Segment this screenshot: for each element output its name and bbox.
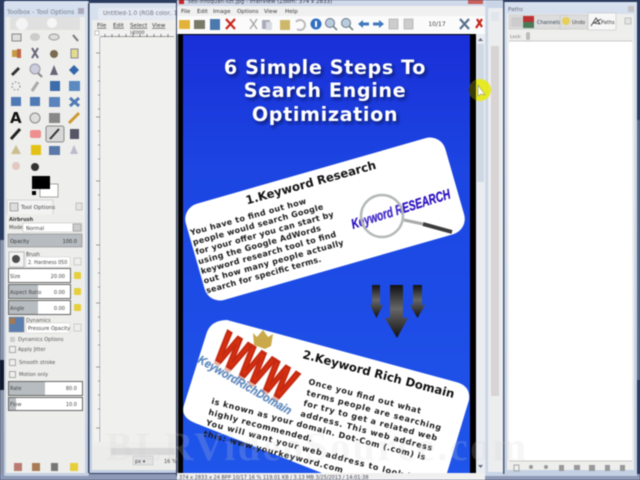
title: Optimization xyxy=(252,103,398,126)
viewer menu bar: View xyxy=(264,9,278,15)
image viewer window xyxy=(176,0,486,480)
step 1 body text: out how many people actually xyxy=(202,238,345,286)
viewer menu bar: Help xyxy=(285,9,298,15)
icon: keyword rich domain www logo: KeywordRichDomain xyxy=(196,352,294,418)
icon: keyword research magnifier: Keyword RESEARCH xyxy=(349,185,453,232)
title: Search Engine xyxy=(244,79,406,102)
right dock strip xyxy=(484,0,503,476)
viewer menu bar: Image xyxy=(213,9,231,15)
step 2 body text xyxy=(202,377,442,480)
status bar xyxy=(177,473,485,480)
icon: yellow cursor highlight xyxy=(469,79,491,101)
title: Optimization xyxy=(254,106,400,128)
airbrush options panel: Airbrush xyxy=(9,217,34,223)
icon: keyword rich domain www logo: WWW xyxy=(207,324,304,409)
tool icons xyxy=(10,33,80,171)
title: Search Engine xyxy=(246,82,408,104)
brush size, aspect and angle sliders: 0.00 xyxy=(54,290,65,296)
paths dock window: Lock: xyxy=(510,34,522,40)
viewer menu bar: Options xyxy=(237,9,259,15)
viewer toolbar xyxy=(177,16,485,34)
airbrush options panel: Normal xyxy=(26,226,44,232)
step 1 heading: 1.Keyword Research xyxy=(244,158,378,207)
tool options tab xyxy=(7,200,82,215)
rate and flow sliders xyxy=(8,382,82,410)
step 1 body text: You have to find out how xyxy=(188,197,308,238)
image black frame xyxy=(178,34,476,473)
dynamics options: Apply Jitter xyxy=(18,347,47,353)
airbrush options panel xyxy=(7,214,84,471)
rate and flow sliders: Flow xyxy=(10,402,21,408)
toolbox header drop area xyxy=(10,17,80,30)
GIMP image window: Select xyxy=(130,23,148,29)
dynamics options: Dynamics Options xyxy=(18,337,64,343)
dynamics options: Motion only xyxy=(19,372,48,378)
icon: keyword rich domain www logo xyxy=(197,328,302,415)
step 1 body text: search for specific terms. xyxy=(205,255,322,295)
GIMP image window: View xyxy=(152,23,166,29)
step 1 body text: keyword research tool to find xyxy=(200,230,337,276)
step 1 body text: using the Google AdWords xyxy=(197,224,322,266)
rulers: |-2000 xyxy=(130,30,145,36)
dynamics options: Pressure Opacity xyxy=(28,326,70,332)
icon: keyword research magnifier xyxy=(349,185,453,237)
title: 6 Simple Steps To xyxy=(224,56,426,79)
step 2 body text: terms people are searching xyxy=(305,388,442,433)
paths dock buttons xyxy=(514,465,625,471)
step 2 heading: 2.Keyword Rich Domain xyxy=(301,347,456,401)
GIMP image window: Edit xyxy=(113,23,125,29)
GIMP image window: Untitled-1.0 (RGB color, 1 xyxy=(103,11,178,17)
dock tabs xyxy=(509,13,631,30)
dynamics options: Smooth stroke xyxy=(19,360,55,366)
brush size, aspect and angle sliders: 20.00 xyxy=(51,274,65,280)
rate and flow sliders: 80.0 xyxy=(66,386,77,392)
airbrush options panel: Mode: xyxy=(9,225,25,231)
arrows: three dark downward arrows xyxy=(370,285,425,338)
dock tabs: Channels xyxy=(537,20,561,26)
viewer menu bar xyxy=(177,6,485,16)
dock tabs: Paths xyxy=(601,20,615,26)
step 2 body text: for try to get a related web xyxy=(302,399,438,443)
scroll bar xyxy=(476,34,485,473)
step 1 body text: people would search Google xyxy=(192,202,325,247)
viewer menu bar: File xyxy=(181,9,191,15)
brush size, aspect and angle sliders xyxy=(8,268,81,314)
image window status area: 16 % xyxy=(164,459,177,465)
rate and flow sliders: Rate xyxy=(10,386,21,392)
step 2 body text: address. This web address xyxy=(299,409,434,453)
tool icons: A xyxy=(10,109,22,127)
step 1 body text xyxy=(189,198,344,294)
airbrush options panel: Brush xyxy=(26,252,40,258)
image window status area xyxy=(92,447,177,470)
brush size, aspect and angle sliders: Size xyxy=(10,274,20,280)
airbrush options panel: 2. Hardness 050 xyxy=(28,260,67,266)
viewer menu bar: Edit xyxy=(197,9,209,15)
GIMP image window: File xyxy=(97,23,107,29)
rate and flow sliders: 10.0 xyxy=(66,402,77,408)
panel: step 2 keyword rich domain xyxy=(183,320,469,480)
dynamics options: Dynamics xyxy=(26,318,51,324)
image window status area: px ▾ xyxy=(135,459,146,465)
brush size, aspect and angle sliders: Angle xyxy=(10,306,24,312)
title xyxy=(224,56,428,128)
brush size, aspect and angle sliders: 0.00 xyxy=(54,306,65,312)
paths dock window xyxy=(503,2,637,476)
airbrush options panel: 100.0 xyxy=(63,239,77,245)
dynamics options xyxy=(9,317,81,378)
step 2 body text: is known as your domain. Dot-Com (.com) is xyxy=(210,397,427,462)
infographic cards area xyxy=(181,134,469,480)
foreground and background colour swatches xyxy=(32,176,58,197)
step 2 body text: this: www.yourkeyword.com xyxy=(202,429,344,475)
watermark: BLRVideoSource.com xyxy=(106,424,526,469)
viewer toolbar: 10/17 xyxy=(428,21,446,28)
GIMP toolbox window: Toolbox - Tool Options xyxy=(6,9,74,16)
title: 6 Simple Steps To xyxy=(226,58,428,82)
viewer title bar xyxy=(177,0,485,6)
step 2 body text: highly recommended. xyxy=(207,408,313,444)
airbrush options panel: Opacity xyxy=(10,239,29,245)
tool options bottom buttons xyxy=(14,463,78,471)
blue infographic background xyxy=(183,35,470,473)
dock tabs: Undo xyxy=(572,20,585,26)
icon: keyword rich domain www logo: WWW xyxy=(205,327,302,412)
paths dock window: Paths xyxy=(508,7,523,13)
GIMP image window xyxy=(88,3,178,473)
GIMP toolbox window xyxy=(4,1,89,476)
step 2 body text: Once you find out what xyxy=(307,377,422,416)
brush size, aspect and angle sliders: Aspect Ratio xyxy=(10,290,41,296)
tool options tab: Tool Options xyxy=(20,205,55,211)
step 1 body text: for your offer you can start by xyxy=(194,210,335,257)
panel: step 1 keyword research xyxy=(181,134,469,304)
rulers xyxy=(94,30,174,442)
